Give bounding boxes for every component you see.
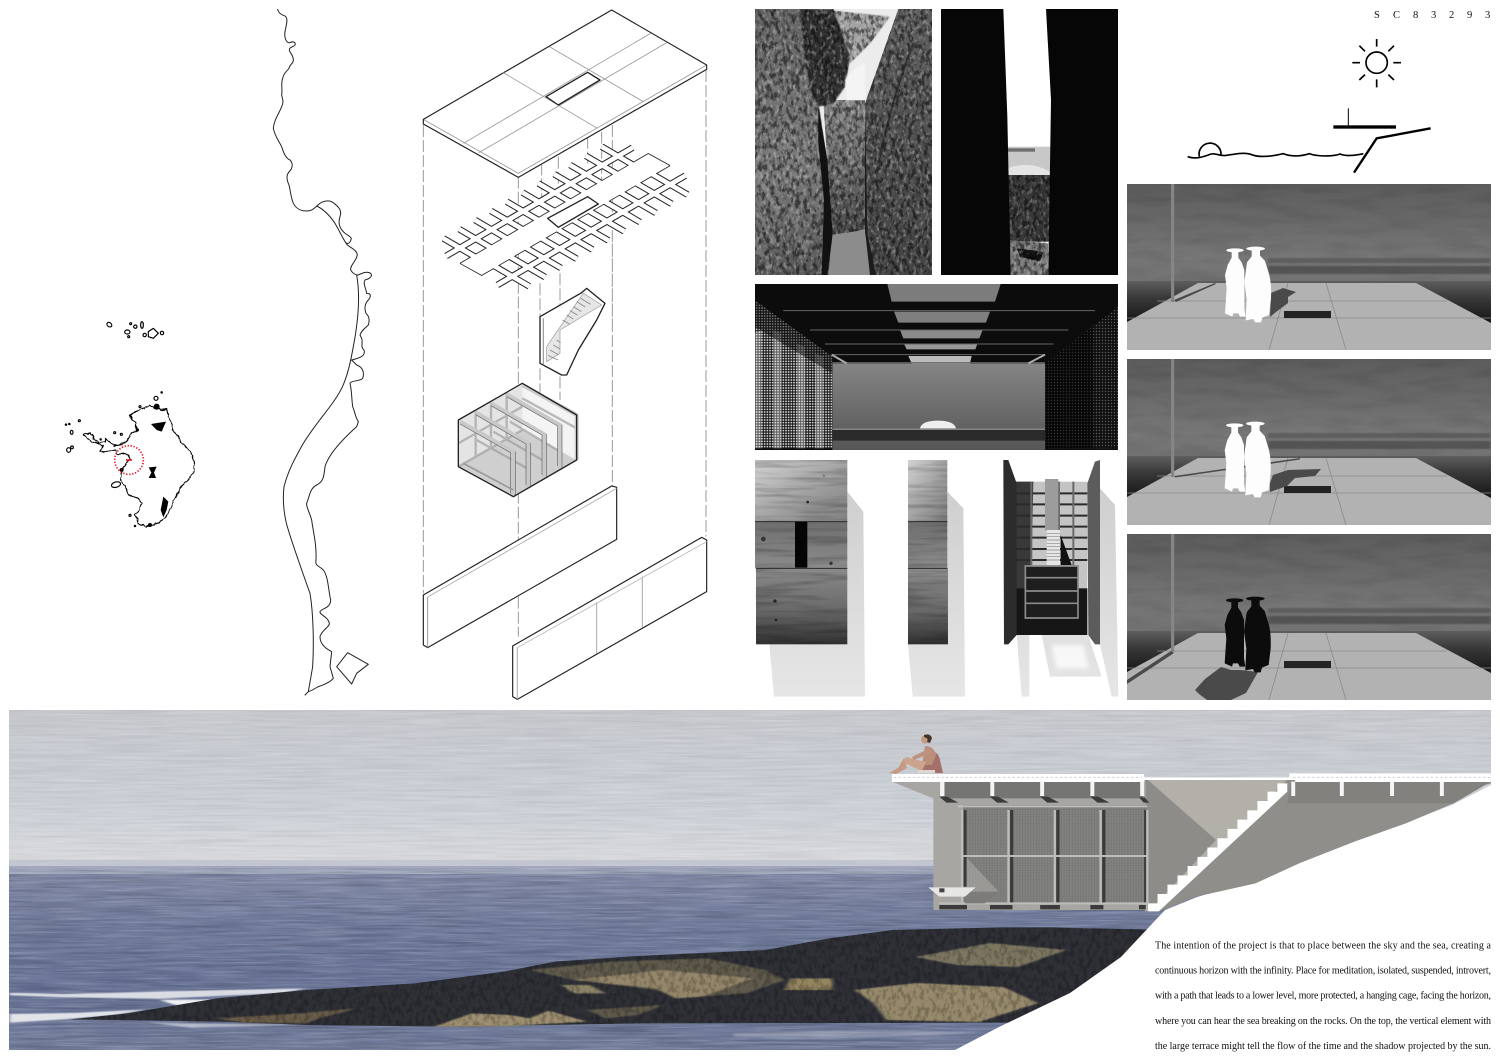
section: shaded ceiling between posts	[943, 782, 1143, 798]
model 1: seams, slot and knots	[755, 474, 847, 621]
low sun	[920, 421, 956, 428]
photo: sky and sea	[9, 710, 1491, 1050]
axo: dashed projection lines	[423, 70, 706, 637]
distant sea and rocks	[1008, 146, 1050, 172]
text block: project statement: the large terrace might tell the flow of the time and the shadow projected by the sun.	[1155, 1041, 1491, 1052]
text block: project statement: where you can hear the sea breaking on the rocks. On the top, the vertical element with	[1155, 1016, 1491, 1027]
axo: roof slab	[423, 10, 707, 177]
section: roof underside right	[1287, 782, 1491, 803]
ceiling beams	[783, 311, 1095, 363]
section: left concrete body	[892, 782, 1146, 910]
section: staircase	[1148, 783, 1287, 911]
photo: foam on the rocks	[10, 988, 982, 1038]
low rock wall	[1008, 175, 1050, 242]
black figures	[1225, 597, 1271, 672]
model 3: open section with stair and cage	[1003, 460, 1118, 697]
photo: rocky islet	[70, 927, 1147, 1027]
model 2: seams	[908, 522, 947, 568]
map: coastline detail	[273, 9, 371, 695]
section: terrace slab and posts	[892, 773, 1491, 796]
icon: horizon section sketch	[1188, 108, 1431, 173]
map: red dotted locator circle	[115, 446, 143, 474]
wood grain	[755, 460, 955, 645]
map: main island coastline	[83, 405, 194, 527]
left mesh wall	[755, 300, 832, 448]
ceiling strips	[887, 284, 1001, 302]
text block: project statement	[1155, 940, 1492, 1052]
map: island location	[65, 321, 194, 527]
coast: small island	[337, 653, 368, 684]
left black wall	[941, 9, 1011, 275]
building section	[892, 773, 1491, 911]
text block: project statement: The intention of the project is that to place between the sky and the sea, creating a	[1155, 940, 1492, 952]
model 1: closed face with slot	[755, 460, 865, 697]
photo: rock passage with tree	[755, 9, 932, 275]
axo: hanging cage frame	[458, 383, 577, 497]
map: small islands	[65, 321, 164, 527]
panel: main section over the sea	[9, 710, 1500, 1059]
sketch: sunset on the sea	[1199, 143, 1221, 157]
panel: terrace scene, evening	[1127, 534, 1491, 700]
section: triangular stair wall	[1145, 777, 1289, 911]
tree core	[800, 9, 850, 107]
panel: terrace scene, midday	[1127, 359, 1491, 525]
top right code: SC83293	[1374, 10, 1490, 21]
white figures	[1225, 247, 1271, 322]
panel: terrace scene, morning	[1127, 184, 1491, 350]
icon: sun	[1352, 39, 1401, 87]
tree branches	[817, 9, 890, 63]
coast: southern peninsula outline	[283, 272, 371, 695]
photo: interior view through the cage	[755, 284, 1118, 450]
passage floor	[827, 229, 876, 275]
passage back wall	[823, 100, 865, 235]
section: small balcony	[928, 887, 999, 903]
figure: seated woman	[889, 734, 943, 774]
axo: waffle floor structure	[443, 147, 688, 286]
sketch: wavy water line	[1188, 153, 1363, 158]
shadow of figures and pole	[1174, 458, 1321, 492]
left rock wall	[755, 9, 833, 275]
photo: dark slit framing the sea	[941, 9, 1118, 275]
white page cut in the photo	[955, 785, 1500, 1059]
map: lakes and reefs	[120, 404, 168, 527]
rock crevices	[755, 10, 913, 275]
white figures	[1225, 422, 1271, 497]
right black wall	[1046, 9, 1118, 275]
sketch: cliff line	[1354, 128, 1431, 173]
shadow of figures and pole	[1174, 283, 1296, 317]
shadow of figures and pole	[1127, 651, 1258, 700]
sketch: terrace plank and post	[1333, 108, 1396, 129]
right mesh wall	[1045, 307, 1118, 448]
text block: project statement: with a path that leads to a lower level, more protected, a hanging cage, facing the horizon,	[1155, 990, 1491, 1002]
axo: long side wall	[423, 486, 617, 648]
horizon wall view	[832, 363, 1045, 450]
section: dark beam ends	[939, 797, 1149, 909]
section: concrete under-terrace wedge	[1159, 777, 1491, 911]
right rock wall	[865, 9, 932, 275]
axo: segmented side wall	[513, 537, 707, 699]
exploded axonometric diagram	[423, 10, 707, 699]
lower beam	[832, 430, 1049, 441]
axo: stair element	[540, 288, 605, 375]
model 2: narrow closed face	[908, 460, 965, 697]
section: mesh cage	[939, 805, 1147, 903]
wooden model views	[755, 460, 1118, 697]
text block: project statement: continuous horizon with the infinity. Place for meditation, isolated, suspended, introvert,	[1155, 966, 1491, 976]
coast: northern shoreline	[273, 9, 358, 275]
